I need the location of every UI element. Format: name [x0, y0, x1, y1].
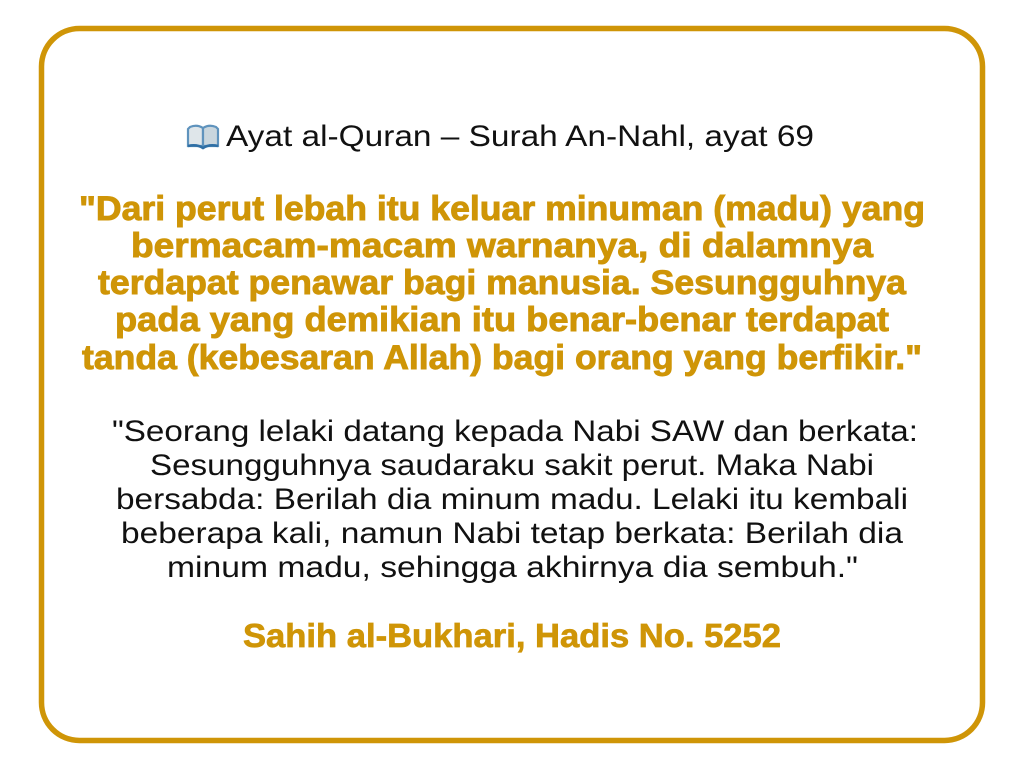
text block: hadith narration: "Seorang lelaki datang kepada Nabi SAW dan berkata: [112, 415, 918, 448]
text block: hadith narration [112, 415, 918, 584]
quote: Quran verse: pada yang demikian itu benar-benar terdapat [115, 301, 889, 339]
quote: Quran verse: tanda (kebesaran Allah) bagi orang yang berfikir." [82, 339, 922, 377]
text block: hadith narration: minum madu, sehingga akhirnya dia sembuh." [167, 551, 858, 584]
text block: hadith narration: bersabda: Berilah dia minum madu. Lelaki itu kembali [116, 483, 908, 516]
icon: open book [188, 126, 218, 148]
quote: Quran verse [79, 190, 925, 377]
heading: verse reference: Ayat al-Quran – Surah An-Nahl, ayat 69 [226, 120, 814, 153]
quote: Quran verse: terdapat penawar bagi manusia. Sesungguhnya [98, 264, 907, 302]
text block: hadith narration: Sesungguhnya saudaraku sakit perut. Maka Nabi [150, 449, 874, 482]
text block: hadith narration: beberapa kali, namun Nabi tetap berkata: Berilah dia [121, 517, 904, 550]
source: hadith citation: Sahih al-Bukhari, Hadis No. 5252 [243, 617, 781, 654]
quote: Quran verse: bermacam-macam warnanya, di dalamnya [131, 227, 874, 265]
quote: Quran verse: "Dari perut lebah itu keluar minuman (madu) yang [79, 190, 925, 228]
